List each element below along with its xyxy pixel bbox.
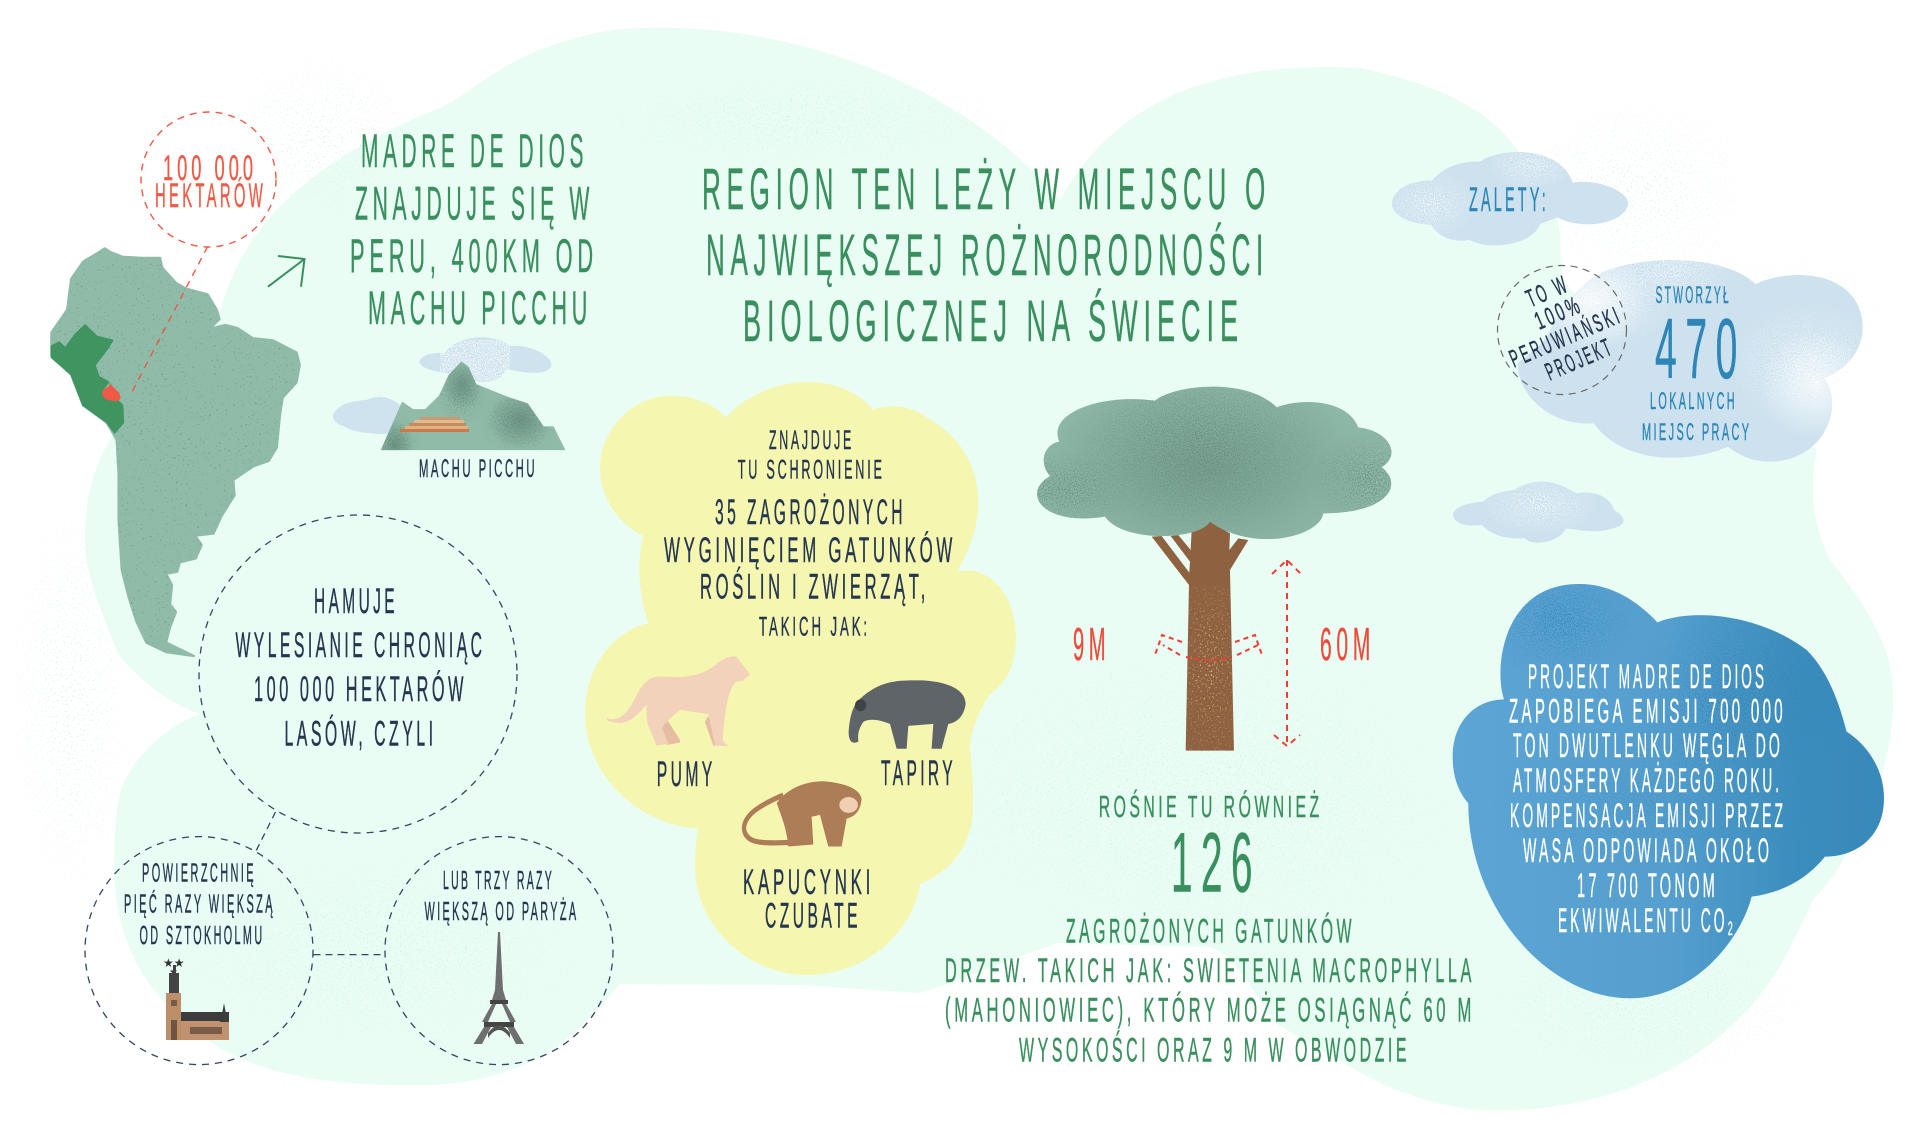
panel: deforestation circle: WYLESIANIE CHRONIĄC [236, 626, 486, 665]
branches and trunk [1152, 522, 1248, 751]
text: CO2 [1509, 658, 1786, 940]
cloud: jobs: STWORZYŁ [1656, 282, 1731, 309]
text: CO2: 17 700 TONOM [1577, 867, 1718, 905]
text: MACHU PICCHU [368, 281, 592, 334]
panel: deforestation circle [199, 515, 517, 833]
connector: Stockholm to Paris [314, 954, 384, 956]
icon: terraces [400, 417, 469, 432]
text block: 126 species: ZAGROŻONYCH GATUNKÓW [1066, 913, 1355, 951]
cloud: jobs: LOKALNYCH [1650, 388, 1737, 415]
panel: Paris circle: LUB TRZY RAZY [443, 865, 554, 895]
panel: Stockholm circle: OD SZTOKHOLMU [140, 920, 264, 950]
icon: Stockholm city hall: ★ [169, 967, 178, 978]
text block: 126 species: ROŚNIE TU RÓWNIEŻ [1099, 788, 1323, 824]
badge: 100% Peruvian project: PERUWIAŃSKI [1505, 300, 1626, 373]
illustration: tree [990, 355, 1430, 755]
text block: 126 species [945, 788, 1475, 1070]
annotation: 9 m girth arrows [1155, 635, 1262, 660]
callout: 100 000 hectares [132, 112, 276, 392]
panel: yellow species cloud: TAPIRY [881, 754, 956, 793]
text: 60M [1320, 618, 1375, 670]
text: shelter: TAKICH JAK: [759, 612, 870, 642]
crown [1037, 387, 1392, 539]
icon: Eiffel tower [474, 932, 524, 1044]
text: HEKTARÓW [155, 177, 266, 215]
icon: capuchin monkey [744, 781, 862, 846]
text block: 126 species: WYSOKOŚCI ORAZ 9 M W OBWODZIE [1019, 1031, 1410, 1070]
icon: tapir [849, 680, 966, 749]
map: Peru [51, 325, 123, 433]
panel: blue CO2 cloud [1453, 560, 1884, 998]
panel: yellow species cloud [585, 382, 1016, 975]
cloud: jobs: MIEJSC PRACY [1642, 419, 1752, 446]
text block: 126 species: 126 [1171, 816, 1261, 910]
panel: Paris circle [385, 837, 613, 1065]
icon: Stockholm city hall: ★★ [163, 956, 185, 970]
text: shelter [664, 425, 956, 642]
badge: 100% Peruvian project: 100% [1531, 291, 1587, 335]
cloud: decorative lower [1453, 475, 1624, 543]
text: BIOLOGICZNEJ NA ŚWIECIE [743, 289, 1244, 354]
icon: puma [606, 656, 750, 746]
label: capuchin: CZUBATE [765, 896, 861, 936]
connector: deforestation to Stockholm [256, 812, 276, 851]
panel: deforestation circle: LASÓW, CZYLI [284, 715, 436, 754]
text: 9M [1073, 618, 1110, 670]
annotation: 60 m height arrow [1272, 560, 1301, 746]
callout: 100 000 hectares: 100 000 [163, 149, 257, 188]
text: shelter: ZNAJDUJE [769, 425, 854, 455]
map: Madre de Dios region [102, 383, 120, 401]
badge: 100% Peruvian project: TO W [1522, 270, 1574, 313]
panel: yellow species cloud: KAPUCYNKI [743, 863, 874, 902]
text: shelter: ROŚLIN I ZWIERZĄT, [700, 566, 929, 606]
badge: 100% Peruvian project: PROJEKT [1541, 333, 1618, 386]
panel: Stockholm circle [85, 837, 313, 1065]
icon: Stockholm city hall [163, 956, 229, 1040]
panel: deforestation circle: 100 000 HEKTARÓW [254, 670, 467, 709]
panel: Paris circle: WIĘKSZĄ OD PARYŻA [424, 896, 578, 926]
text: MADRE DE DIOS [361, 124, 588, 177]
panel: yellow species cloud: PUMY [657, 755, 716, 794]
cloud: jobs: 470 [1655, 302, 1746, 397]
map: South America [40, 240, 310, 660]
label: capuchin [743, 863, 874, 936]
cloud: Zalety: ZALETY: [1469, 181, 1549, 219]
title [702, 157, 1271, 354]
heading: Madre de Dios location [350, 124, 598, 334]
text: shelter: 35 ZAGROŻONYCH [715, 493, 906, 532]
panel: Stockholm circle: POWIERZCHNIĘ [142, 858, 256, 888]
cloud: jobs [1518, 260, 1863, 462]
panel: Stockholm circle: PIĘĆ RAZY WIĘKSZĄ [124, 888, 275, 918]
text: shelter: TU SCHRONIENIE [738, 455, 885, 485]
panel: yellow species cloud: WYGINIĘCIEM GATUNKÓW [664, 531, 956, 570]
text: PERU, 400KM OD [350, 229, 598, 282]
text: MACHU PICCHU [419, 455, 537, 483]
text: ZNAJDUJE SIĘ W [355, 177, 594, 230]
badge: 100% Peruvian project [1486, 256, 1636, 397]
illustration: Machu Picchu mountain with clouds [332, 337, 566, 450]
panel: deforestation circle: HAMUJE [314, 582, 398, 621]
arrow [268, 256, 304, 287]
cloud: Zalety [1392, 152, 1628, 246]
